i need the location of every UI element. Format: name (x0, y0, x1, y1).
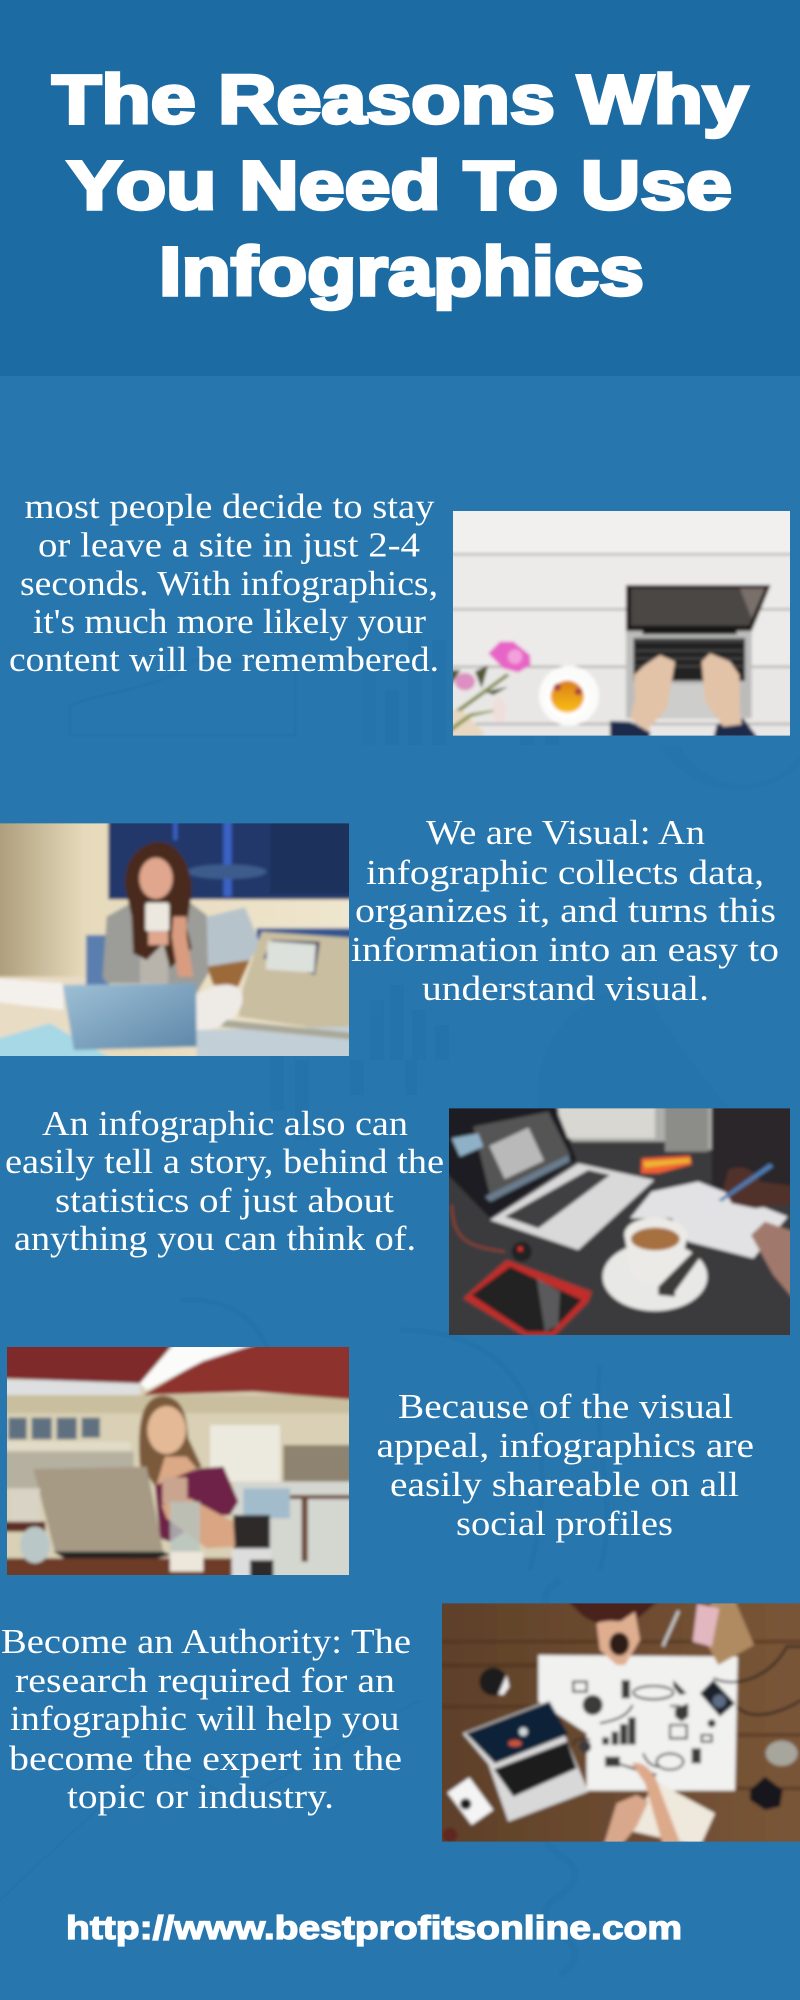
text block: we are visual: understand visual. (422, 969, 709, 1008)
text block: first reason (9, 487, 439, 679)
text block: tell a story: statistics of just about (55, 1181, 394, 1220)
title: The Reasons Why (52, 61, 748, 138)
text block: shareable: Because of the visual (398, 1387, 733, 1426)
header band (0, 0, 800, 376)
text block: shareable: social profiles (456, 1504, 673, 1543)
text block: tell a story: anything you can think of. (14, 1219, 416, 1258)
text block: first reason: or leave a site in just 2-4 (38, 526, 420, 564)
text block: shareable (376, 1387, 754, 1543)
footer url: http://www.bestprofitsonline.com (66, 1909, 682, 1946)
text block: become an authority (1, 1622, 411, 1816)
photo: laptop and tea on white desk (447, 505, 797, 742)
title: You Need To Use (67, 147, 732, 224)
text block: we are visual (351, 813, 779, 1008)
photo: woman with phone at cafe (0, 1342, 357, 1582)
text block: first reason: most people decide to stay (24, 487, 435, 526)
text block: become an authority: topic or industry. (67, 1777, 334, 1816)
text block: become an authority: Become an Authority: The (1, 1622, 411, 1661)
text block: tell a story (5, 1104, 444, 1258)
title: Infographics (159, 233, 644, 310)
title (52, 61, 748, 310)
text block: first reason: seconds. With infographics, (20, 564, 438, 603)
text block: become an authority: research required for an (15, 1661, 395, 1700)
text block: become an authority: infographic will help you (10, 1699, 400, 1738)
text block: shareable: easily shareable on all (390, 1465, 739, 1504)
text block: shareable: appeal, infographics are (376, 1426, 754, 1465)
text block: we are visual: information into an easy to (351, 930, 779, 969)
photo: laptop, coffee and notebook on dark table (442, 1102, 798, 1342)
text block: tell a story: easily tell a story, behind the (5, 1142, 444, 1181)
photo: woman with mug on bed (0, 817, 357, 1063)
text block: we are visual: We are Visual: An (426, 813, 705, 852)
text block: tell a story: An infographic also can (42, 1104, 408, 1143)
text block: we are visual: infographic collects data, (366, 853, 764, 892)
text block: first reason: content will be remembered. (9, 640, 439, 679)
text block: we are visual: organizes it, and turns this (355, 891, 776, 930)
text block: first reason: it's much more likely your (33, 602, 426, 641)
photo: team planning on wooden table (437, 1597, 800, 1847)
text block: become an authority: become the expert in the (9, 1739, 402, 1778)
